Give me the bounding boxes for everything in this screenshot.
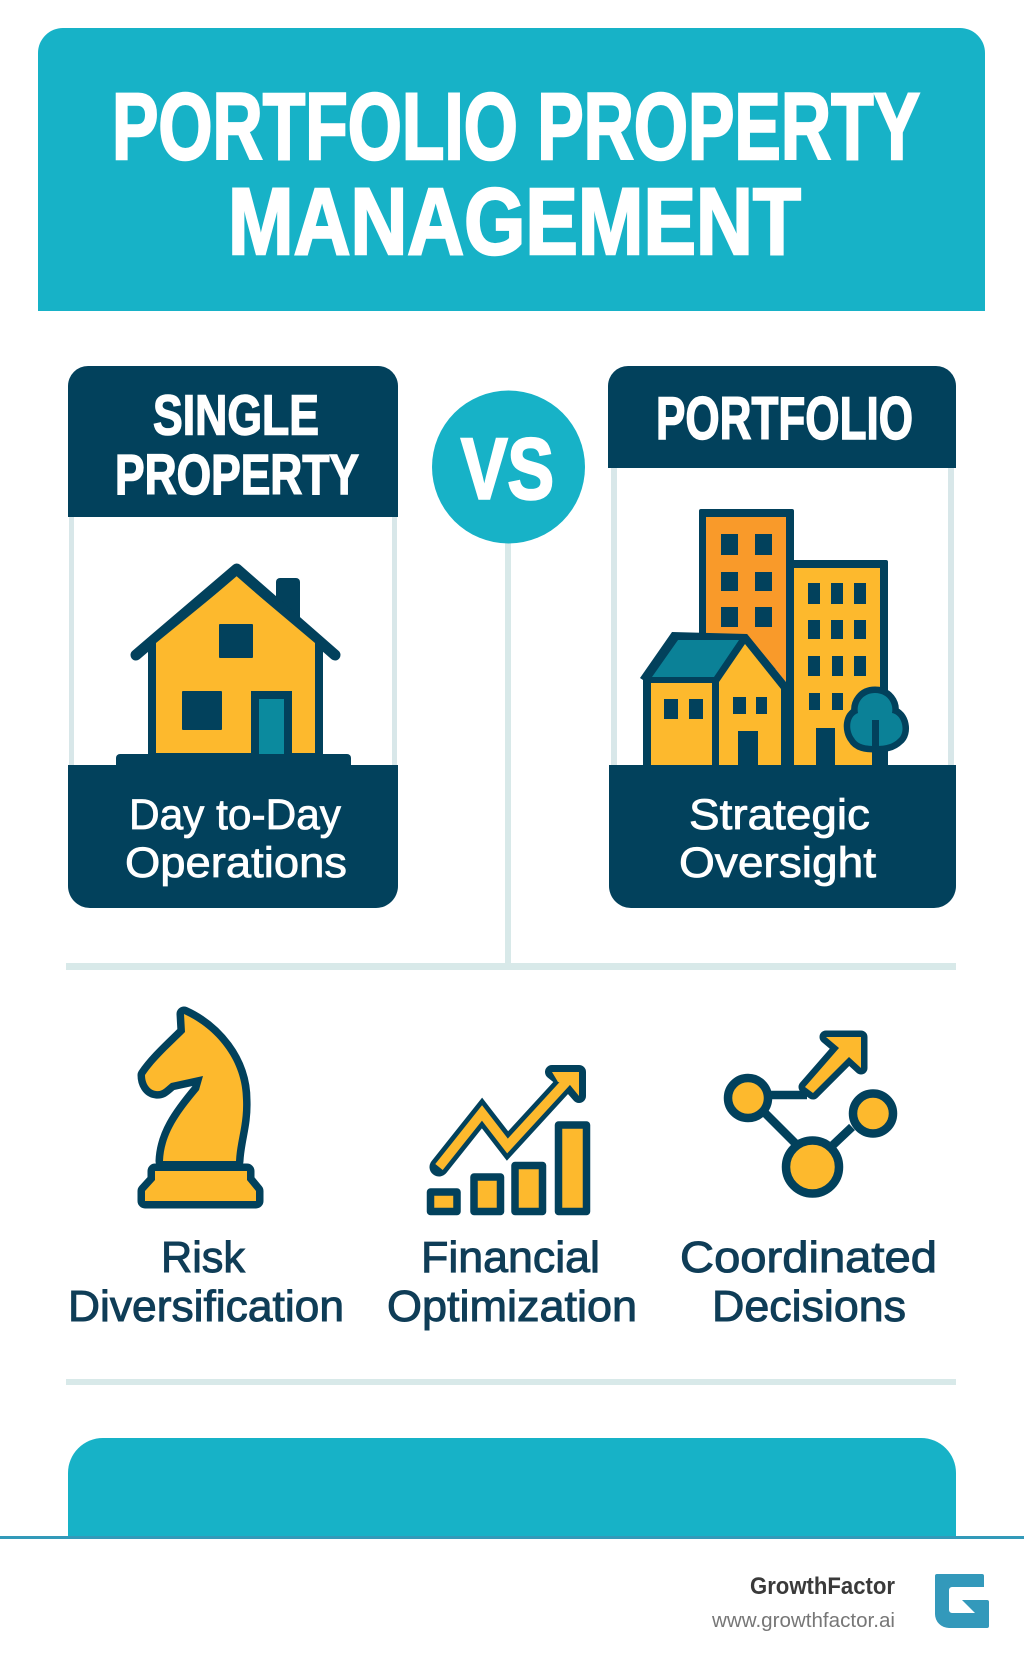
yellow tower [786,560,888,766]
title banner [38,28,985,311]
vs badge: VS [461,422,554,518]
portfolio footer: Strategic [689,791,870,839]
footer brand text: www.growthfactor.ai [711,1610,895,1632]
single property footer: Day to-Day [129,791,341,839]
icon: GrowthFactor logo [935,1574,989,1628]
label: Coordinated [680,1233,937,1282]
title text: MANAGEMENT [228,169,801,275]
benefit: financial optimization [387,1072,637,1331]
portfolio footer: Oversight [679,839,876,887]
small house [640,632,794,767]
single property header: PROPERTY [115,443,359,507]
single property footer [68,765,398,908]
portfolio footer [609,765,956,908]
benefit: coordinated decisions [680,1037,937,1331]
footer brand text [711,1573,895,1632]
orange tower [699,509,794,682]
benefit: risk diversification [68,1014,344,1331]
label [680,1233,937,1331]
single property header [68,366,398,517]
icon: growth chart [430,1072,586,1212]
icon: chess knight [145,1014,256,1201]
vs badge [432,390,585,544]
footer rule [0,1536,1024,1539]
label: Risk [161,1233,246,1282]
icon: city buildings [640,509,903,767]
label [68,1233,344,1331]
tree [850,693,903,767]
label: Decisions [712,1282,906,1331]
label [387,1233,637,1331]
portfolio header: PORTFOLIO [656,385,913,452]
portfolio header [608,366,956,468]
bottom teal panel [68,1438,956,1537]
panel: portfolio [608,366,956,908]
icon: house [116,569,351,766]
icon: network with arrow [728,1037,893,1194]
panel: single property [68,366,398,908]
title text [112,74,920,275]
divider lines [66,540,956,1385]
label: Diversification [68,1282,344,1331]
single property header: SINGLE [153,384,319,448]
label: Financial [421,1233,600,1282]
footer brand text: GrowthFactor [750,1573,895,1600]
label: Optimization [387,1282,637,1331]
single property footer: Operations [125,839,347,887]
